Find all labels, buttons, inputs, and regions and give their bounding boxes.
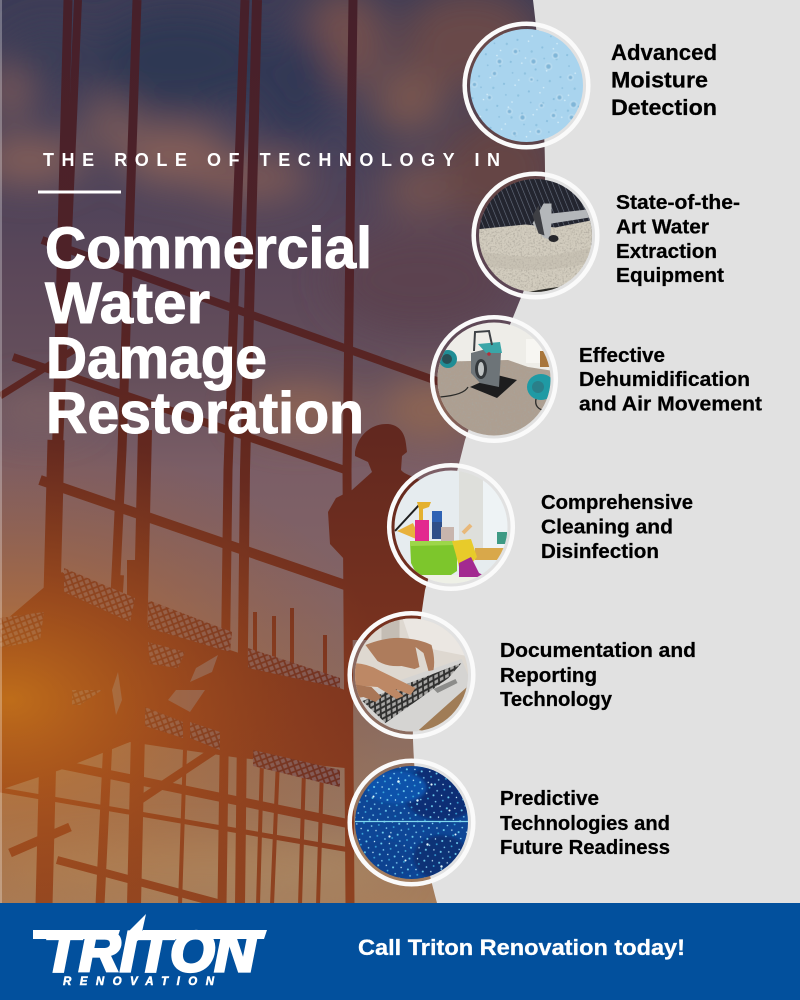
label: Advanced xyxy=(611,40,717,65)
label: Reporting xyxy=(500,665,597,687)
background photo: scaffolding and worker at dusk xyxy=(0,0,560,905)
label xyxy=(541,492,693,563)
main title: Damage xyxy=(46,326,267,391)
main title: Restoration xyxy=(46,381,364,446)
logo tagline: RENOVATION xyxy=(63,976,215,988)
title block xyxy=(38,150,500,446)
left edge highlight xyxy=(0,0,2,903)
worker silhouette xyxy=(328,424,432,640)
item 2: water extraction xyxy=(474,174,740,297)
main title: Water xyxy=(45,271,210,336)
label: Art Water xyxy=(616,216,709,238)
label: Dehumidification xyxy=(579,369,750,391)
label: Effective xyxy=(579,345,665,367)
label: Disinfection xyxy=(541,541,659,563)
item 5: documentation and reporting xyxy=(350,613,696,737)
label: Technologies and xyxy=(500,813,670,835)
scaffolding silhouette xyxy=(0,0,560,905)
item 6: predictive technologies xyxy=(348,761,670,884)
label: Future Readiness xyxy=(500,837,670,859)
logo wordmark: TRITON xyxy=(44,920,258,984)
logo lightning spike and top bars xyxy=(33,914,267,942)
label: State-of-the- xyxy=(616,192,740,214)
footer call to action: Call Triton Renovation today! xyxy=(358,935,685,960)
label: Predictive xyxy=(500,788,599,810)
label xyxy=(500,788,670,859)
label xyxy=(611,40,717,120)
eyebrow heading: THE ROLE OF TECHNOLOGY IN xyxy=(43,150,500,170)
label: Extraction xyxy=(616,241,717,263)
orange glow xyxy=(0,0,560,905)
item 1: moisture detection xyxy=(465,24,717,147)
light grey curved panel xyxy=(413,0,800,903)
label: Cleaning and xyxy=(541,516,673,538)
Triton Renovation logo xyxy=(33,914,267,988)
scaffold platform and netting xyxy=(0,568,345,790)
photo: water droplets xyxy=(465,24,588,147)
label: Documentation and xyxy=(500,640,696,662)
label: Equipment xyxy=(616,265,724,287)
label: Detection xyxy=(611,95,717,120)
item 3: dehumidification xyxy=(432,317,762,441)
label xyxy=(616,192,740,287)
sky xyxy=(0,0,560,905)
main title: Commercial xyxy=(45,216,372,281)
heading underline xyxy=(38,190,121,194)
photo: bucket of cleaning supplies xyxy=(389,465,513,589)
photo: extraction wand on carpet xyxy=(474,174,597,297)
photo: hands typing on laptop xyxy=(350,613,473,737)
main title xyxy=(45,216,372,446)
label xyxy=(579,345,762,416)
photo: dehumidifier and air movers xyxy=(432,317,556,441)
photo: blue digital data field xyxy=(348,761,480,884)
label xyxy=(500,640,696,711)
label: Comprehensive xyxy=(541,492,693,514)
label: Moisture xyxy=(611,68,708,92)
item 4: cleaning and disinfection xyxy=(389,465,693,589)
label: and Air Movement xyxy=(579,394,762,416)
label: Technology xyxy=(500,689,613,711)
footer band xyxy=(0,903,800,1000)
